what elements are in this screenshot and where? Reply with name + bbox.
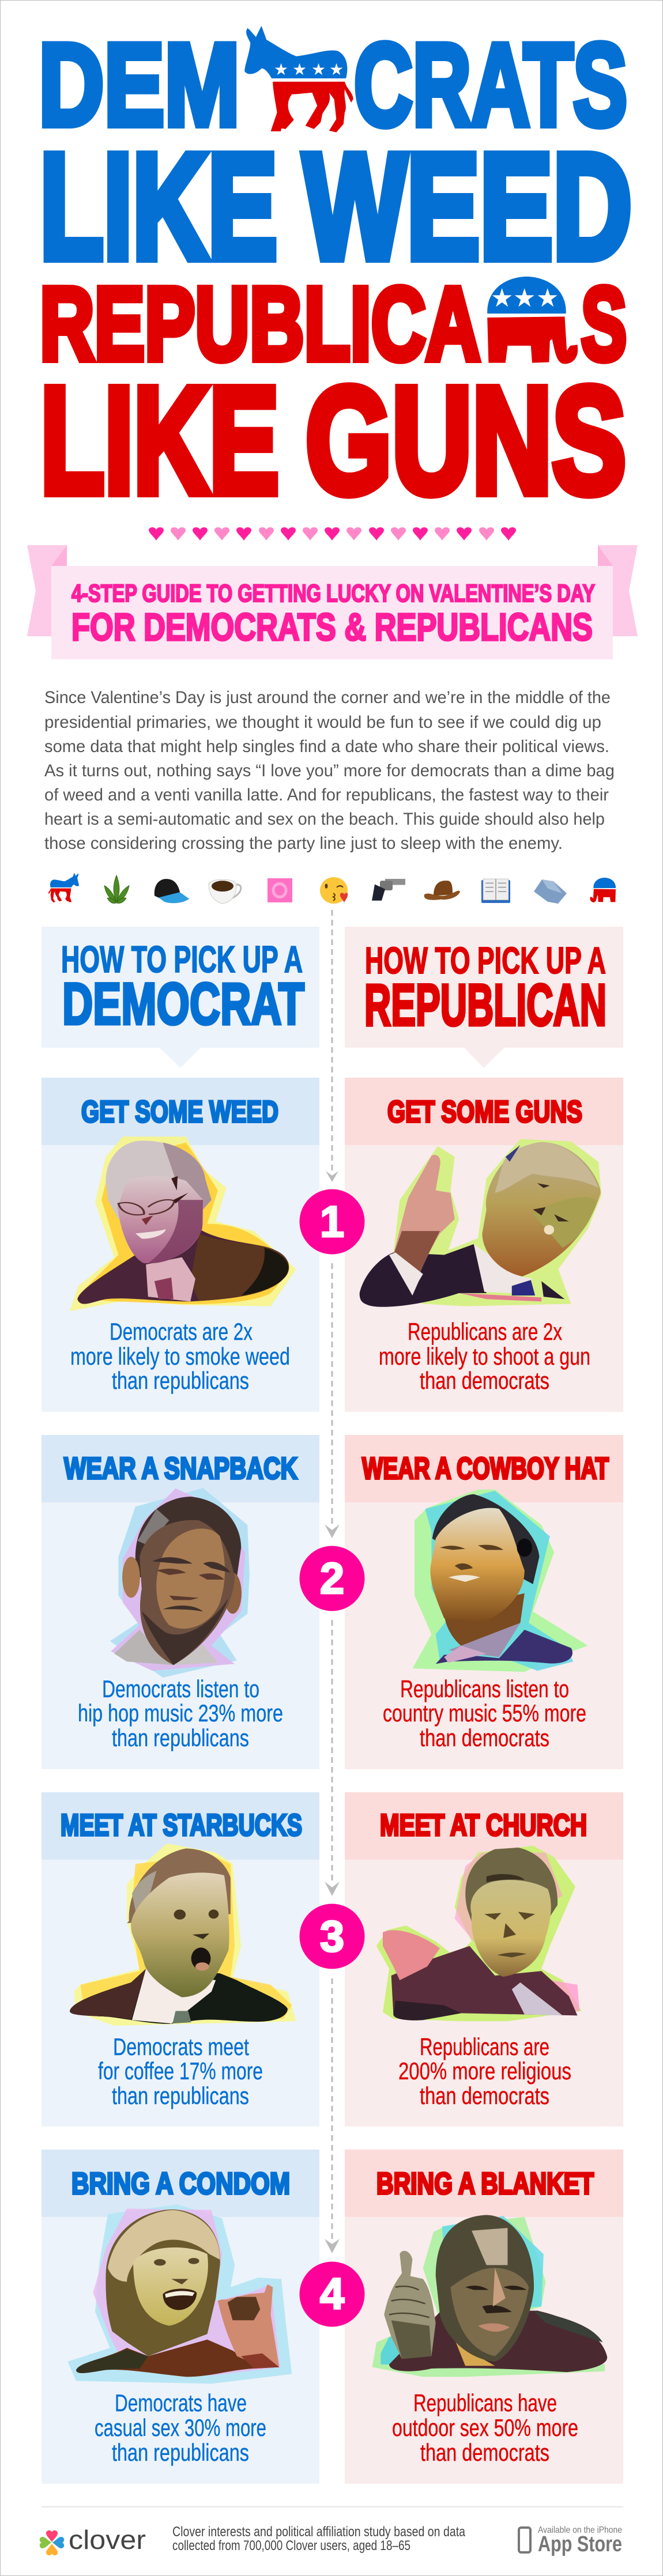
panel: step 2 democrat bbox=[42, 1435, 319, 1769]
step badge 3: 3 bbox=[320, 1912, 344, 1961]
step badge 3 bbox=[300, 1904, 364, 1969]
text: stat: than democrats bbox=[420, 2439, 549, 2466]
panel: step 1 republican bbox=[345, 1078, 623, 1412]
icon: cowboy hat bbox=[424, 881, 460, 900]
intro paragraph: Since Valentine’s Day is just around the corner and we’re in the middle of the bbox=[44, 688, 611, 707]
icon: republican elephant bbox=[487, 277, 578, 364]
step badge 1 bbox=[300, 1189, 364, 1254]
donkey star: ★ bbox=[311, 60, 326, 79]
donkey stars: ★ bbox=[274, 60, 288, 79]
donkey star: ★ bbox=[292, 60, 307, 79]
text: stat: than democrats bbox=[420, 2082, 549, 2109]
app store badge bbox=[519, 2525, 622, 2556]
portrait: Barack Obama bbox=[110, 1488, 250, 1678]
step badge 4 bbox=[300, 2261, 364, 2327]
heading: how to pick up a: HOW TO PICK UP A bbox=[61, 938, 303, 980]
intro paragraph: those considering crossing the party line just to sleep with the enemy. bbox=[44, 834, 563, 853]
text: stat: Democrats have bbox=[115, 2389, 247, 2416]
step badge 2 bbox=[300, 1546, 364, 1611]
step badge 4: 4 bbox=[320, 2269, 344, 2318]
panel: step 3 democrat bbox=[42, 1792, 319, 2126]
heading: wear a snapback: WEAR A SNAPBACK bbox=[64, 1452, 297, 1486]
row of hearts bbox=[149, 527, 516, 541]
available label: Available on the iPhone bbox=[538, 2525, 622, 2535]
clover logo bbox=[40, 2525, 146, 2555]
text: stat bbox=[98, 2033, 263, 2109]
step badge 1: 1 bbox=[320, 1198, 344, 1247]
portrait: Martin O'Malley bbox=[70, 1844, 296, 2026]
text: stat: Democrats listen to bbox=[102, 1675, 259, 1702]
app store label: App Store bbox=[538, 2532, 622, 2556]
portrait: Donald Trump bbox=[360, 1139, 601, 1307]
text: stat: than republicans bbox=[112, 2439, 249, 2466]
text: stat bbox=[78, 1675, 283, 1751]
panel: step 2 republican bbox=[345, 1435, 623, 1769]
elephant star: ★ bbox=[536, 284, 559, 313]
footnote: collected from 700,000 Clover users, aged 18–65 bbox=[172, 2538, 410, 2554]
text: stat: Republicans are 2x bbox=[408, 1318, 562, 1345]
icon: democrat donkey bbox=[244, 26, 353, 133]
icon: donkey bbox=[48, 873, 79, 902]
text: stat bbox=[70, 1318, 290, 1394]
intro paragraph: presidential primaries, we thought it would be fun to see if we could dig up bbox=[44, 713, 601, 732]
text: stat: hip hop music 23% more bbox=[78, 1699, 283, 1727]
text: stat: Republicans listen to bbox=[400, 1675, 569, 1702]
text: stat: than democrats bbox=[420, 1724, 549, 1751]
panel: step 4 democrat bbox=[42, 2150, 319, 2484]
portrait: Marco Rubio bbox=[412, 1490, 588, 1672]
title line: LIKE: LIKE bbox=[40, 356, 279, 525]
icon: coffee mug bbox=[209, 879, 241, 904]
text: stat: for coffee 17% more bbox=[98, 2057, 263, 2084]
text: stat: more likely to shoot a gun bbox=[379, 1343, 590, 1370]
panel: step 4 republican bbox=[345, 2150, 623, 2484]
heading: meet at church: MEET AT CHURCH bbox=[380, 1808, 587, 1842]
heading: meet at starbucks: MEET AT STARBUCKS bbox=[61, 1808, 302, 1842]
elephant star: ★ bbox=[491, 284, 513, 313]
intro paragraph: heart is a semi-automatic and sex on the beach. This guide should also help bbox=[44, 810, 605, 829]
text: stat bbox=[383, 1675, 586, 1751]
text: stat: Democrats are 2x bbox=[110, 1318, 253, 1345]
text: stat: casual sex 30% more bbox=[95, 2414, 266, 2441]
icon: weed leaf bbox=[104, 875, 129, 903]
footnote: Clover interests and political affiliation study based on data bbox=[172, 2524, 466, 2540]
panel: how to pick up a democrat bbox=[42, 927, 319, 1068]
icon: elephant bbox=[590, 878, 616, 902]
portrait: Hillary Clinton bbox=[67, 2204, 292, 2384]
intro paragraph: some data that might help singles find a date who share their political views. bbox=[44, 737, 609, 756]
text: stat bbox=[95, 2389, 266, 2466]
text: stat: outdoor sex 50% more bbox=[392, 2414, 578, 2441]
title line: REPUBLICA: REPUBLICA bbox=[40, 266, 480, 382]
portrait: Bernie Sanders bbox=[70, 1136, 296, 1311]
text: stat: than democrats bbox=[420, 1367, 549, 1394]
portrait: Ted Cruz bbox=[376, 1846, 582, 2021]
text: stat: country music 55% more bbox=[383, 1699, 586, 1727]
icon: snapback cap bbox=[155, 879, 189, 903]
title line: DEM: DEM bbox=[39, 20, 240, 150]
icon: revolver bbox=[372, 879, 405, 901]
text: stat: more likely to smoke weed bbox=[70, 1343, 290, 1370]
title line: final S: S bbox=[581, 266, 627, 382]
portrait: Ben Carson bbox=[372, 2215, 607, 2377]
donkey star: ★ bbox=[329, 60, 344, 79]
heading: bring a condom: BRING A CONDOM bbox=[71, 2167, 290, 2201]
step badge 2: 2 bbox=[320, 1554, 344, 1603]
text: stat bbox=[398, 2033, 571, 2109]
icon: kissing emoji bbox=[320, 877, 348, 904]
heading: get some guns: GET SOME GUNS bbox=[387, 1095, 582, 1129]
heading: get some weed: GET SOME WEED bbox=[81, 1095, 278, 1129]
text: stat: Republicans are bbox=[420, 2033, 549, 2060]
intro paragraph: of weed and a venti vanilla latte. And for republicans, the fastest way to their bbox=[44, 785, 609, 804]
dashed timeline with arrows bbox=[325, 910, 340, 2253]
panel: step 1 democrat bbox=[42, 1078, 319, 1412]
heading: bring a blanket: BRING A BLANKET bbox=[376, 2167, 594, 2201]
footnote bbox=[172, 2524, 466, 2554]
text: stat: 200% more religious bbox=[398, 2057, 571, 2084]
panel: how to pick up a republican bbox=[345, 927, 623, 1068]
intro paragraph: As it turns out, nothing says “I love you” more for democrats than a dime bag bbox=[44, 761, 615, 780]
text: stat: Republicans have bbox=[413, 2389, 557, 2416]
title line: LIKE: LIKE bbox=[40, 123, 277, 290]
title: Democrats like weed, Republicans like guns bbox=[39, 20, 632, 525]
icon row bbox=[48, 873, 616, 904]
panel: step 3 republican bbox=[345, 1792, 623, 2126]
intro paragraph bbox=[44, 688, 615, 853]
heading: democrat: DEMOCRAT bbox=[62, 971, 304, 1037]
text: stat: than republicans bbox=[112, 1724, 249, 1751]
wordmark: clover bbox=[69, 2525, 146, 2555]
text: stat: Democrats meet bbox=[113, 2033, 249, 2060]
text: stat: than republicans bbox=[112, 2082, 249, 2109]
text: stat bbox=[392, 2389, 578, 2466]
ribbon banner bbox=[27, 545, 638, 659]
icon: open book bbox=[481, 879, 510, 903]
icon: condom packet bbox=[268, 878, 292, 902]
text: stat: than republicans bbox=[112, 1367, 249, 1394]
icon: blanket bbox=[534, 879, 567, 904]
elephant star: ★ bbox=[513, 284, 536, 313]
text: stat bbox=[379, 1318, 590, 1394]
